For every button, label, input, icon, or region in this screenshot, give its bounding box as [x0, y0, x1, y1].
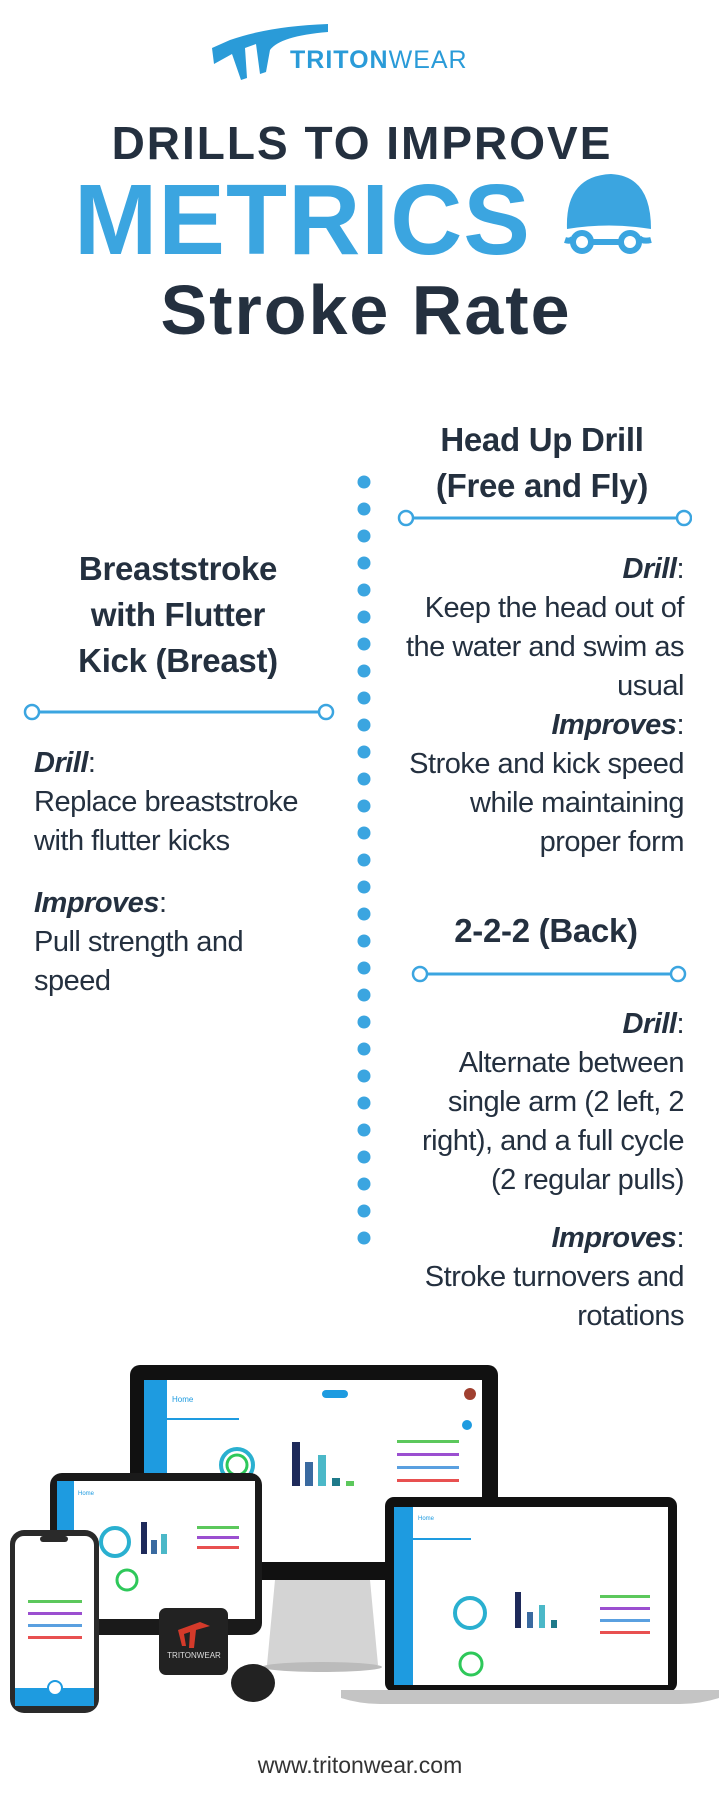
phone	[10, 1530, 99, 1713]
drill text: Alternate between	[459, 1047, 684, 1079]
improves text: Pull strength and	[34, 926, 243, 958]
heading: breaststroke	[78, 550, 278, 679]
subtitle: stroke rate: Stroke Rate	[160, 271, 572, 349]
heading: 2-2-2: 2-2-2 (Back)	[454, 912, 638, 949]
improves text	[34, 887, 243, 997]
device mockups image: Home	[418, 1516, 435, 1522]
monitor	[267, 1580, 378, 1665]
drill text	[406, 553, 684, 858]
heading: breaststroke: Breaststroke	[79, 550, 277, 587]
heading: head up drill: (Free and Fly)	[436, 467, 648, 504]
title: metrics: METRICS	[74, 164, 531, 276]
footer url: www.tritonwear.com	[258, 1752, 462, 1778]
panel: head up drill	[398, 421, 692, 858]
panel: 2-2-2 back	[412, 912, 686, 1332]
logo: TRITONWEAR	[290, 46, 468, 74]
divider line	[24, 704, 334, 720]
dotted divider	[358, 476, 370, 1244]
drill text: Drill:	[623, 1008, 684, 1040]
improves text: Stroke turnovers and	[425, 1261, 684, 1293]
divider line	[412, 966, 686, 982]
improves text: rotations	[577, 1300, 684, 1332]
drill text: Drill:	[623, 553, 684, 585]
drill text: Improves:	[551, 709, 684, 741]
drill text: right), and a full cycle	[422, 1125, 684, 1157]
device mockups image: TRITONWEAR	[167, 1651, 221, 1660]
title: drills to improve: DRILLS TO IMPROVE	[112, 117, 612, 169]
drill text: Replace breaststroke	[34, 786, 298, 818]
drill text: Drill:	[34, 747, 95, 779]
heading: breaststroke: Kick (Breast)	[78, 642, 278, 679]
logo	[212, 24, 468, 80]
device mockups image: Home	[172, 1395, 194, 1404]
drill text: with flutter kicks	[34, 825, 230, 857]
laptop	[385, 1497, 677, 1692]
improves text	[425, 1222, 684, 1332]
heading: head up drill: Head Up Drill	[440, 421, 644, 458]
drill text	[422, 1008, 684, 1196]
device mockups image: Home	[78, 1491, 95, 1497]
drill text: Stroke and kick speed	[409, 748, 684, 780]
improves text: Improves:	[551, 1222, 684, 1254]
panel: breaststroke with flutter kick	[24, 550, 334, 997]
drill text: Keep the head out of	[425, 592, 684, 624]
sensor	[159, 1608, 228, 1675]
icon: swim cap	[564, 174, 652, 254]
heading: breaststroke: with Flutter	[91, 596, 265, 633]
improves text: Improves:	[34, 887, 167, 919]
drill text: usual	[617, 670, 684, 702]
drill text: proper form	[540, 826, 684, 858]
heading: head up drill	[436, 421, 648, 504]
drill text: while maintaining	[470, 787, 684, 819]
device mockups image	[10, 1365, 719, 1713]
divider line	[398, 510, 692, 526]
drill text: the water and swim as	[406, 631, 684, 663]
improves text: speed	[34, 965, 111, 997]
drill text: single arm (2 left, 2	[448, 1086, 684, 1118]
tablet	[50, 1473, 262, 1635]
drill text	[34, 747, 298, 857]
drill text: (2 regular pulls)	[491, 1164, 684, 1196]
